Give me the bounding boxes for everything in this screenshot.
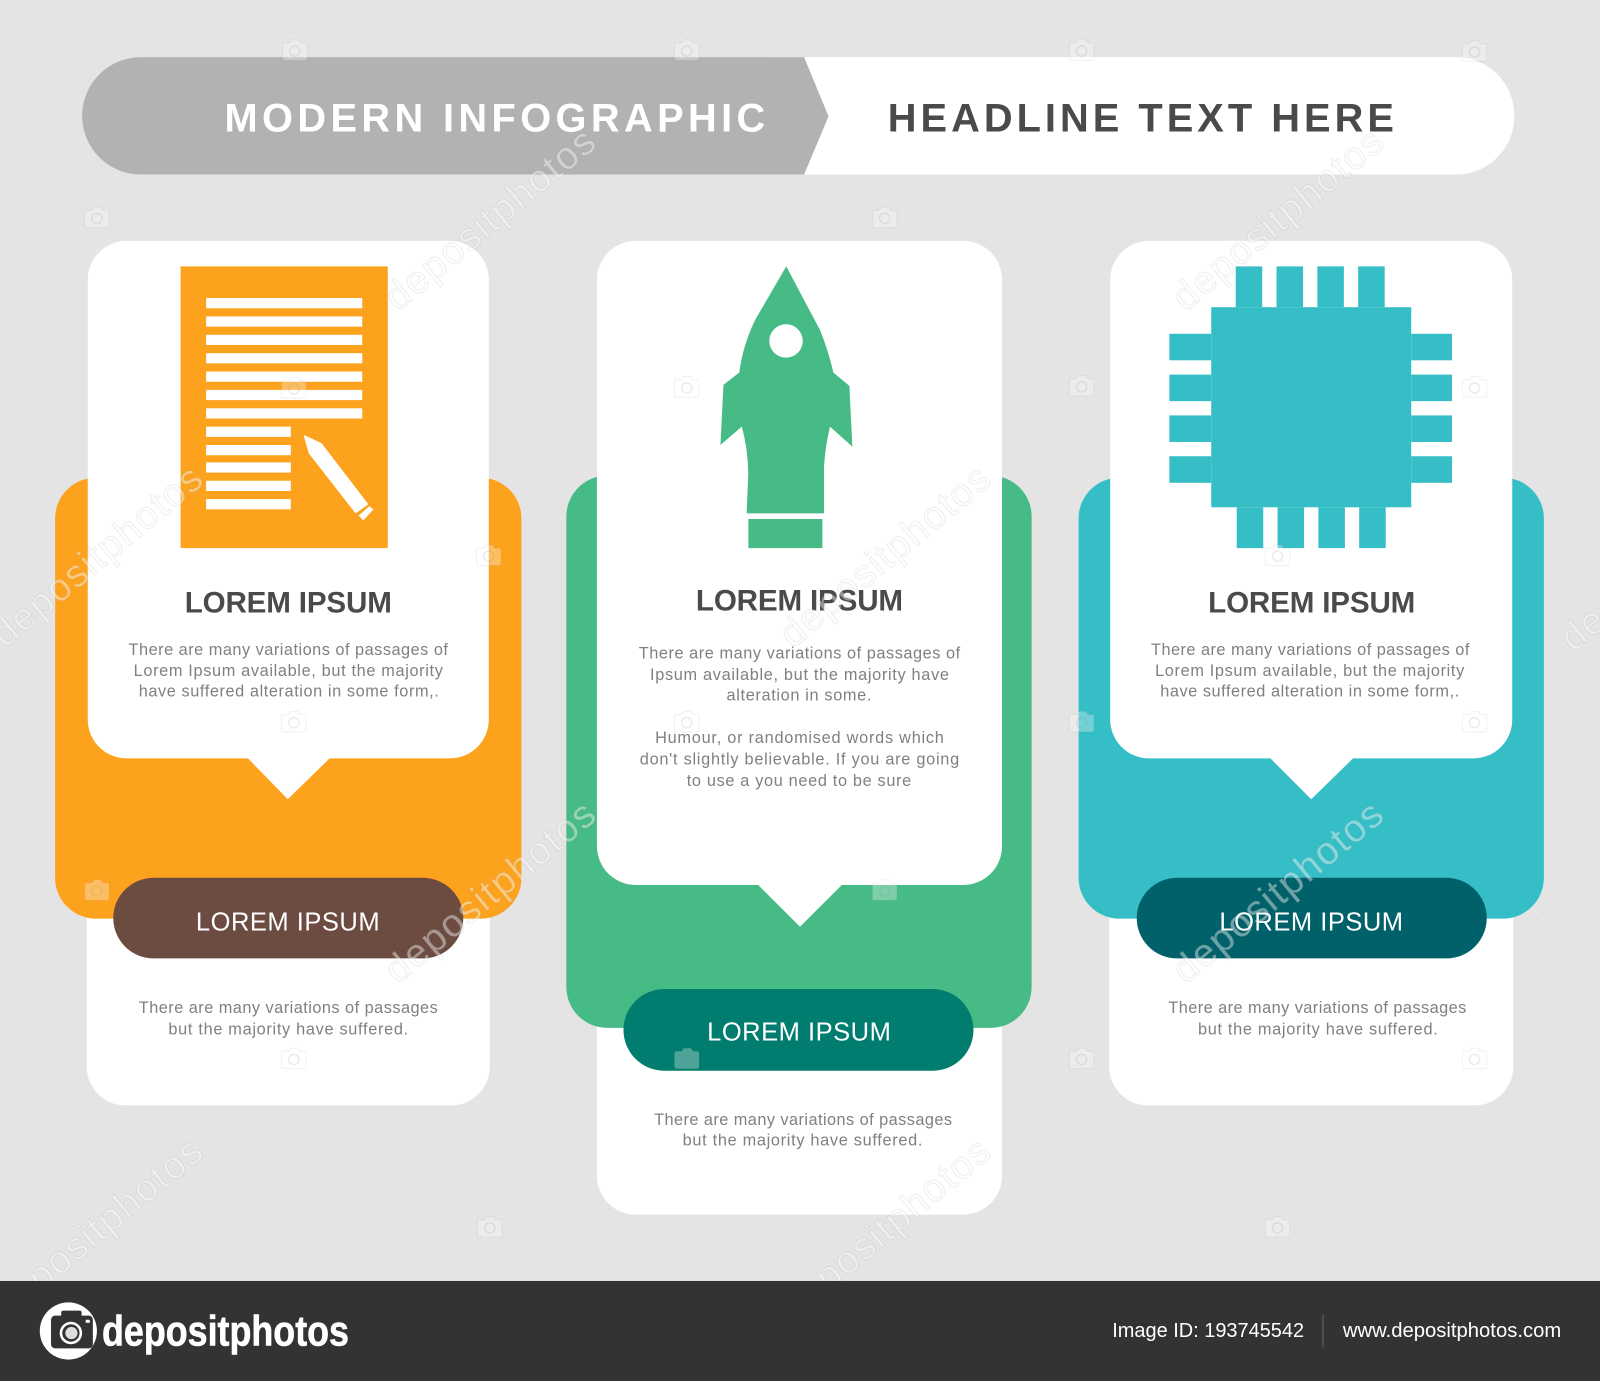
heading: LOREM IPSUM [696,584,903,617]
footnote text [1168,999,1466,1038]
panel: card 3 teal [1079,241,1544,1105]
website url: www.depositphotos.com [1342,1320,1561,1342]
pill label: LOREM IPSUM [707,1019,891,1047]
description text: There are many variations of passages of [639,644,961,662]
watermark text: depositphotos [1164,793,1392,992]
panel: card 2 green [566,241,1032,1215]
icon: camera logo [40,1302,97,1360]
footnote text [654,1111,952,1150]
description text [129,641,448,701]
watermark camera icons [85,40,1487,1237]
description text: don't slightly believable. If you are going [640,750,959,769]
pill label [1137,878,1487,958]
icon: document with pencil [181,266,388,548]
upper white speech card [1110,241,1512,799]
watermark text: depositphotos [376,120,604,319]
description text: have suffered alteration in some form,. [139,683,439,701]
pill label: LOREM IPSUM [196,908,380,936]
orange backing [55,478,521,919]
footnote text: but the majority have suffered. [1198,1020,1438,1038]
teal backing [1079,478,1544,919]
description text: alteration in some. [727,687,871,705]
watermark text: depositphotos [376,793,604,992]
footnote text: There are many variations of passages [1168,999,1466,1017]
header title left: MODERN INFOGRAPHIC [224,97,765,141]
panel: card 1 orange [55,241,521,1105]
lower white card [87,817,490,1105]
description text: have suffered alteration in some form,. [1160,683,1459,701]
footer bar [0,1281,1600,1381]
watermark text: depositphotos [1164,120,1392,319]
description text: Lorem Ipsum available, but the majority [134,662,444,680]
logo wordmark: depositphotos [102,1307,349,1355]
header grey arrow section [82,57,829,175]
description text: Lorem Ipsum available, but the majority [1155,662,1465,680]
description text [1151,641,1470,701]
footnote text: There are many variations of passages [654,1111,952,1129]
icon: microchip [1169,266,1452,548]
upper white speech card [88,241,489,799]
green backing [566,476,1032,1028]
description text: Ipsum available, but the majority have [650,666,949,684]
footnote text: There are many variations of passages [139,999,438,1017]
description text: Humour, or randomised words which [655,729,944,747]
pill label: LOREM IPSUM [1219,908,1403,936]
image id: Image ID: 193745542 [1112,1320,1304,1342]
footnote text: but the majority have suffered. [683,1132,922,1150]
heading: LOREM IPSUM [185,586,392,619]
heading: LOREM IPSUM [1208,586,1415,619]
icon: rocket [720,266,852,548]
header banner [82,57,1514,175]
footnote text [139,999,438,1038]
watermark text: depositphotos [771,457,999,656]
watermark text: depositphotos [771,1129,999,1329]
pill label [113,878,463,958]
header title right: HEADLINE TEXT HERE [888,97,1394,141]
description text [639,644,961,790]
header white section [714,57,1514,175]
lower white card [597,919,1002,1215]
lower white card [1109,817,1513,1105]
upper white speech card [597,241,1002,927]
pill label [623,989,973,1071]
description text: to use a you need to be sure [687,772,911,790]
description text: There are many variations of passages of [129,641,448,659]
description text: There are many variations of passages of [1151,641,1470,659]
footnote text: but the majority have suffered. [168,1020,408,1038]
